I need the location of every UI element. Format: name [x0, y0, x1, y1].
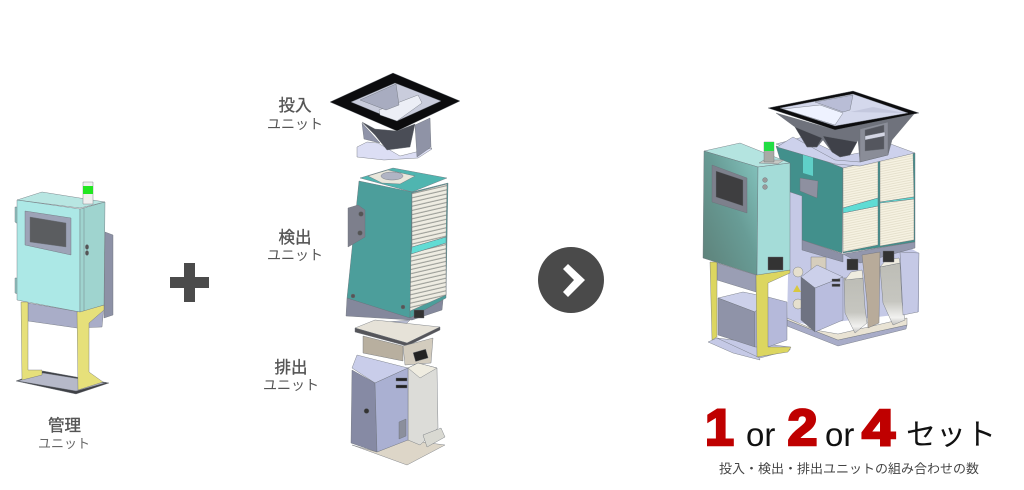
sub: combined cabinet [704, 143, 790, 167]
headline: 1 or 2 or 4 set: セット [906, 419, 996, 452]
unit: combined system illustration [703, 91, 919, 360]
label: input unit [267, 96, 323, 132]
unit: detection unit illustration [346, 168, 448, 330]
icon: plus [170, 263, 209, 302]
label: discharge unit: 排出 [274, 358, 308, 377]
caption: 投入・検出・排出ユニットの組み合わせの数 [719, 461, 980, 476]
sub: combined hopper [777, 137, 915, 166]
unit: management unit illustration [15, 182, 113, 394]
headline: 1 or 2 or 4 set: or [746, 416, 775, 453]
unit: input hopper illustration [330, 73, 460, 160]
label: management unit: 管理 [48, 416, 81, 435]
label: input unit: ユニット [267, 116, 323, 132]
label: detection unit: ユニット [267, 247, 323, 263]
headline: 1 or 2 or 4 set: 4 [862, 399, 896, 456]
label: discharge unit [263, 358, 319, 393]
headline: 1 or 2 or 4 set: 1 [705, 399, 734, 456]
sub: cabinet base stand [708, 338, 760, 360]
unit: discharge unit illustration [351, 320, 445, 465]
label: detection unit: 検出 [278, 228, 312, 247]
sub: lower base and discharge units [787, 320, 907, 346]
label: detection unit [267, 228, 323, 263]
label: input unit: 投入 [278, 96, 312, 115]
headline: 1 or 2 or 4 set: 2 [788, 399, 818, 456]
icon: arrow circle [538, 247, 604, 313]
label: discharge unit: ユニット [263, 377, 319, 393]
headline: 1 or 2 or 4 set: or [825, 416, 854, 453]
label: management unit [38, 416, 90, 451]
sub: lavender back frame [787, 192, 919, 325]
headline: 1 or 2 or 4 set [705, 399, 996, 456]
label: management unit: ユニット [38, 436, 90, 451]
